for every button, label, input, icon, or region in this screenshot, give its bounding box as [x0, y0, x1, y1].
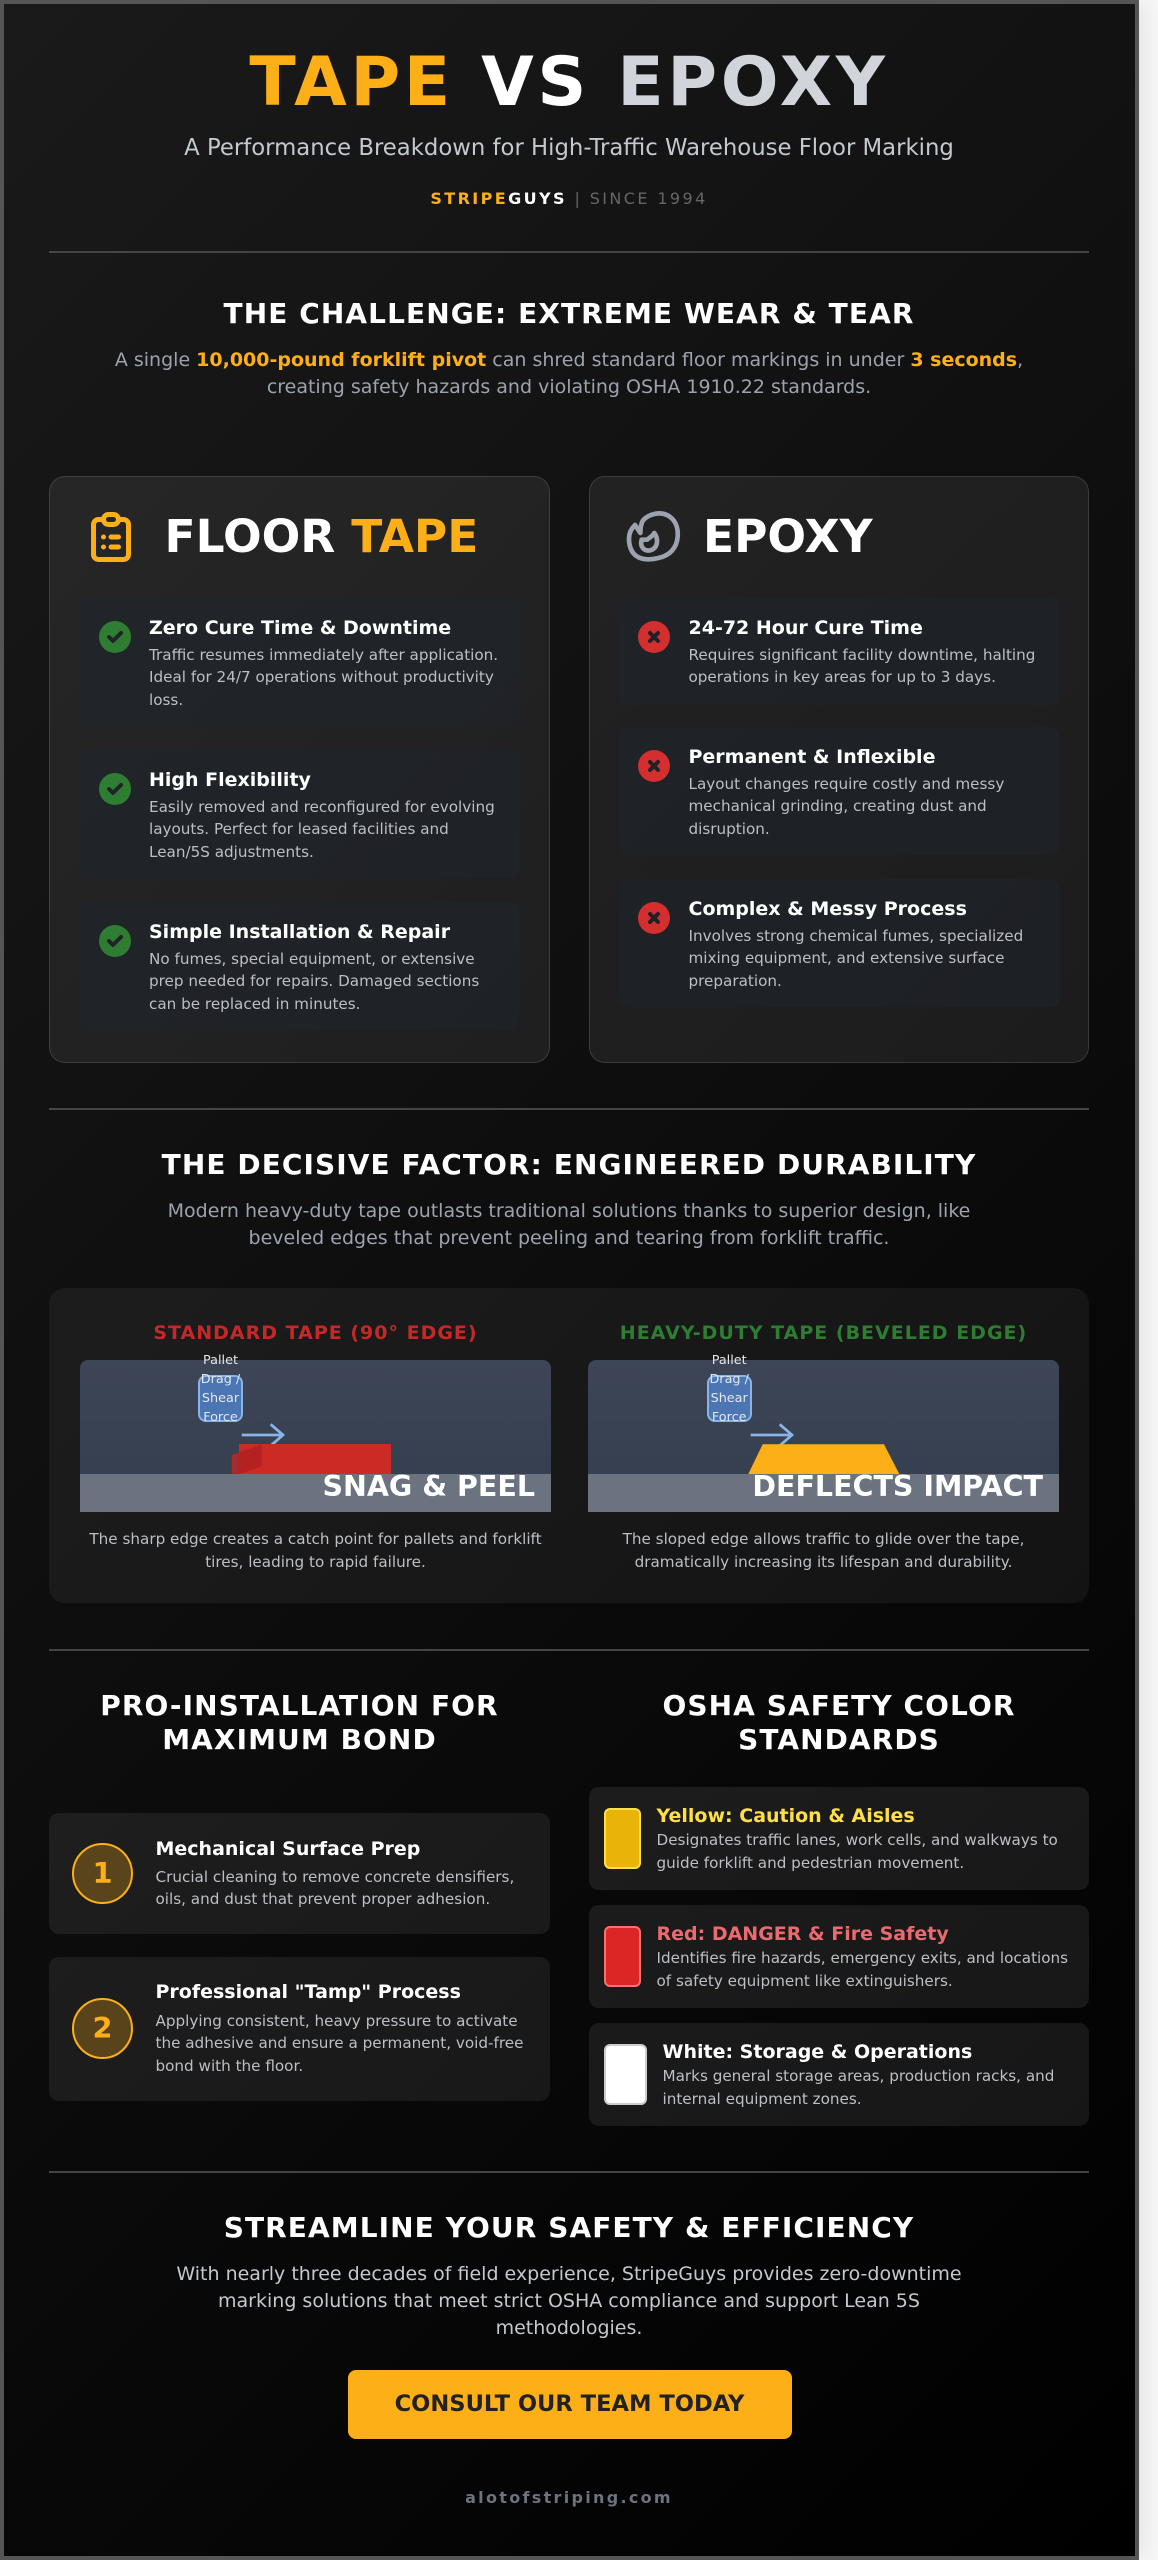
- cta text: [176, 2262, 962, 2338]
- cta button: [348, 2370, 792, 2439]
- benefit text: [149, 950, 479, 1013]
- force label: Shear: [202, 1391, 239, 1406]
- step 2: [49, 1957, 550, 2101]
- challenge text: creating safety hazards and violating OSHA 1910.22 standards.: [267, 376, 871, 398]
- standard tape caption: [89, 1530, 542, 1570]
- panel heading: epoxy: EPOXY: [703, 510, 873, 563]
- diagram label: DEFLECTS IMPACT: [752, 1470, 1043, 1503]
- section: call to action: [176, 2211, 962, 2507]
- drawback text: mechanical grinding, creating dust and: [688, 797, 987, 815]
- icon: check: [99, 925, 131, 957]
- swatch: red: [604, 1926, 641, 1987]
- icon: clipboard: [91, 512, 131, 562]
- drawback text: mixing equipment, and extensive surface: [688, 949, 1004, 967]
- icon: check: [99, 621, 131, 653]
- subtitle: A Performance Breakdown for High-Traffic Warehouse Floor Marking: [184, 135, 954, 161]
- floor: [588, 1474, 1059, 1512]
- swatch: yellow: [604, 1808, 641, 1869]
- step number: 2: [92, 2011, 113, 2045]
- benefit: high flexibility: [80, 750, 519, 878]
- cta heading: STREAMLINE YOUR SAFETY & EFFICIENCY: [224, 2211, 914, 2244]
- benefit text: loss.: [149, 691, 183, 709]
- drawback title: Permanent & Inflexible: [688, 746, 935, 768]
- force label: [709, 1353, 749, 1425]
- white text: internal equipment zones.: [662, 2090, 862, 2108]
- benefit text: [149, 798, 495, 861]
- red title: Red: DANGER & Fire Safety: [656, 1923, 949, 1945]
- step 1: [49, 1813, 550, 1934]
- benefit title: High Flexibility: [149, 769, 311, 791]
- force label: Shear: [711, 1391, 748, 1406]
- benefit title: Simple Installation & Repair: [149, 921, 450, 943]
- decisive factor heading: THE DECISIVE FACTOR: ENGINEERED DURABILITY: [162, 1148, 976, 1181]
- color standard: red: [589, 1905, 1089, 2008]
- heavy-duty tape caption: [622, 1530, 1024, 1570]
- standard tape caption: The sharp edge creates a catch point for pallets and forklift: [89, 1530, 542, 1548]
- heading: standard tape: STANDARD TAPE (90° EDGE): [153, 1322, 478, 1344]
- white text: [662, 2067, 1054, 2108]
- decisive factor text: beveled edges that prevent peeling and tearing from forklift traffic.: [249, 1227, 889, 1249]
- heavy-duty tape caption: dramatically increasing its lifespan and durability.: [635, 1552, 1012, 1570]
- heavy-duty tape caption: The sloped edge allows traffic to glide over the tape,: [623, 1530, 1024, 1548]
- section: the challenge: [115, 297, 1023, 398]
- diagram label: SNAG & PEEL: [322, 1470, 535, 1503]
- force label: Pallet: [712, 1353, 747, 1368]
- panel: edge comparison: [49, 1288, 1089, 1603]
- drawback text: [688, 927, 1023, 990]
- heading: pro-installation: MAXIMUM BOND: [162, 1723, 437, 1756]
- icon: flame: [626, 511, 680, 562]
- cta button: CONSULT OUR TEAM TODAY: [395, 2391, 744, 2417]
- drawback: permanent: [619, 727, 1059, 855]
- drawback: cure time: [619, 598, 1059, 705]
- challenge heading: THE CHALLENGE: EXTREME WEAR & TEAR: [224, 297, 914, 330]
- brand line: STRIPEGUYS | SINCE 1994: [430, 189, 708, 208]
- header: title, subtitle and brand: [184, 43, 954, 208]
- drawback text: preparation.: [688, 972, 782, 990]
- cta text: marking solutions that meet strict OSHA compliance and support Lean 5S: [218, 2290, 920, 2312]
- title: TAPE VS EPOXY: [249, 43, 889, 122]
- benefit title: Zero Cure Time & Downtime: [149, 617, 451, 639]
- step text: bond with the floor.: [156, 2057, 303, 2075]
- step number: [72, 1998, 133, 2059]
- force label: Drag /: [201, 1372, 240, 1387]
- benefit text: Traffic resumes immediately after application.: [149, 646, 498, 664]
- decisive factor text: [168, 1200, 970, 1249]
- red text: of safety equipment like extinguishers.: [656, 1972, 953, 1990]
- step number: 1: [92, 1856, 113, 1890]
- arrow and beveled tape: [748, 1423, 900, 1474]
- yellow text: [656, 1831, 1058, 1872]
- arrow and red tape: [232, 1423, 391, 1474]
- swatch: white: [604, 2044, 647, 2105]
- panel: floor tape: [49, 476, 550, 1063]
- benefit text: Easily removed and reconfigured for evolving: [149, 798, 495, 816]
- step text: oils, and dust that prevent proper adhesion.: [156, 1890, 490, 1908]
- color standard: yellow: [589, 1787, 1089, 1890]
- diagram: heavy-duty tape: [588, 1360, 1059, 1512]
- force label: [201, 1353, 240, 1425]
- yellow title: Yellow: Caution & Aisles: [656, 1805, 915, 1827]
- white title: White: Storage & Operations: [662, 2041, 972, 2063]
- drawback title: 24-72 Hour Cure Time: [688, 617, 923, 639]
- heading: osha colors: [663, 1689, 1015, 1756]
- heading: pro-installation: PRO-INSTALLATION FOR: [100, 1689, 499, 1722]
- benefit text: prep needed for repairs. Damaged sections: [149, 972, 479, 990]
- force label box: [198, 1375, 243, 1422]
- yellow text: Designates traffic lanes, work cells, and walkways to: [656, 1831, 1058, 1849]
- benefit: zero cure time: [80, 598, 519, 726]
- step title: Professional "Tamp" Process: [156, 1981, 461, 2003]
- benefit text: Lean/5S adjustments.: [149, 843, 314, 861]
- drawback text: [688, 646, 1035, 686]
- website footer: alotofstriping.com: [465, 2488, 673, 2507]
- cta text: methodologies.: [496, 2316, 642, 2338]
- drawback: messy process: [619, 879, 1059, 1007]
- drawback text: Requires significant facility downtime, halting: [688, 646, 1035, 664]
- drawback text: disruption.: [688, 820, 770, 838]
- drawback text: operations in key areas for up to 3 days.: [688, 668, 996, 686]
- floor: [80, 1474, 551, 1512]
- benefit text: Ideal for 24/7 operations without productivity: [149, 668, 494, 686]
- standard tape caption: tires, leading to rapid failure.: [205, 1552, 426, 1570]
- red text: Identifies fire hazards, emergency exits, and locations: [656, 1949, 1068, 1967]
- drawback text: Involves strong chemical fumes, specialized: [688, 927, 1023, 945]
- heading: osha colors: STANDARDS: [738, 1723, 940, 1756]
- heading: heavy-duty tape: HEAVY-DUTY TAPE (BEVELED EDGE): [620, 1322, 1027, 1344]
- force label box: [707, 1375, 752, 1422]
- force label: Force: [203, 1410, 238, 1425]
- color standard: white: [589, 2023, 1089, 2126]
- heading: pro-installation: [100, 1689, 499, 1756]
- benefit text: layouts. Perfect for leased facilities and: [149, 820, 449, 838]
- icon: cross: [638, 621, 670, 653]
- drawback title: Complex & Messy Process: [688, 898, 967, 920]
- decisive factor text: Modern heavy-duty tape outlasts traditional solutions thanks to superior design, like: [168, 1200, 970, 1222]
- drawback text: [688, 775, 1004, 838]
- benefit: simple installation: [80, 902, 519, 1030]
- white text: Marks general storage areas, production racks, and: [662, 2067, 1054, 2085]
- diagram: standard tape: [80, 1360, 551, 1512]
- challenge text: A single 10,000-pound forklift pivot can shred standard floor markings in under 3 seconds,: [115, 349, 1023, 371]
- icon: cross: [638, 902, 670, 934]
- section: the decisive factor: [162, 1148, 976, 1249]
- force label: Drag /: [709, 1372, 749, 1387]
- icon: check: [99, 773, 131, 805]
- challenge text: [115, 349, 1023, 398]
- step text: Crucial cleaning to remove concrete densifiers,: [156, 1868, 514, 1886]
- step text: [156, 2012, 523, 2075]
- benefit text: [148, 646, 498, 709]
- benefit text: No fumes, special equipment, or extensive: [149, 950, 475, 968]
- force label: Force: [712, 1410, 746, 1425]
- panel: epoxy: [589, 476, 1089, 1063]
- force label: Pallet: [203, 1353, 238, 1368]
- step title: Mechanical Surface Prep: [156, 1838, 420, 1860]
- panel heading: floor tape: FLOOR TAPE: [164, 510, 478, 563]
- drawback text: Layout changes require costly and messy: [688, 775, 1004, 793]
- step text: Applying consistent, heavy pressure to activate: [156, 2012, 518, 2030]
- step text: the adhesive and ensure a permanent, void-free: [156, 2034, 523, 2052]
- step number: [72, 1842, 133, 1904]
- heading: osha colors: OSHA SAFETY COLOR: [663, 1689, 1015, 1722]
- red text: [656, 1949, 1068, 1990]
- icon: cross: [638, 750, 670, 782]
- cta text: With nearly three decades of field experience, StripeGuys provides zero-downtime: [176, 2262, 962, 2284]
- yellow text: guide forklift and pedestrian movement.: [656, 1854, 964, 1872]
- benefit text: can be replaced in minutes.: [149, 995, 360, 1013]
- step text: [156, 1868, 514, 1908]
